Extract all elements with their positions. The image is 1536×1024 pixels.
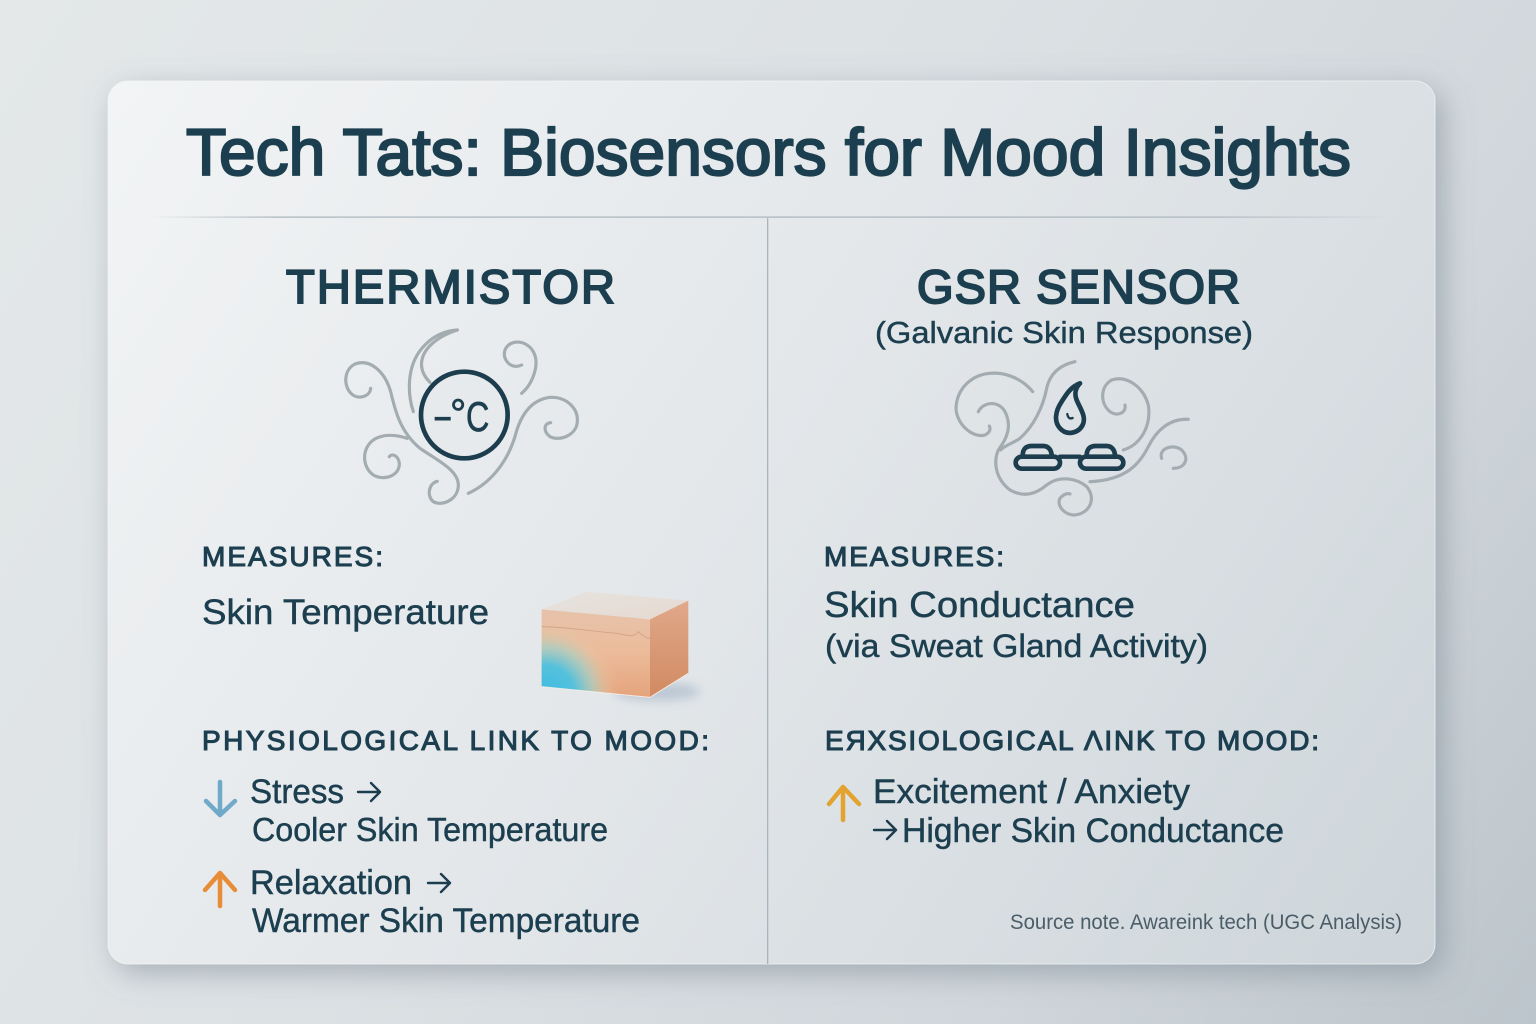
text: stress: Stress	[250, 773, 344, 811]
text: via sweat gland activity: (via Sweat Gland Activity)	[825, 628, 1208, 664]
label: physiological link: EЯXSIOLOGICAL ΛINK TO MOOD:	[825, 725, 1319, 756]
source note: Source note. Awareink tech (UGC Analysis)	[1010, 911, 1402, 934]
icon: relaxation right arrow	[428, 874, 450, 892]
text: cooler skin temperature: Cooler Skin Temperature	[252, 811, 608, 848]
icon: sweat drop and electrodes with swirls	[956, 362, 1188, 515]
label: physiological link: PHYSIOLOGICAL LINK TO MOOD:	[202, 725, 709, 756]
heading: thermistor: THERMISTOR	[286, 260, 615, 313]
text: warmer skin temperature: Warmer Skin Temperature	[252, 902, 640, 940]
text: higher skin conductance: Higher Skin Conductance	[902, 812, 1284, 850]
label: measures: MEASURES:	[202, 541, 383, 572]
icon: thermistor with swirls: °	[450, 390, 466, 436]
subheading: galvanic skin response: (Galvanic Skin Response)	[875, 315, 1253, 350]
icon: up arrow	[829, 787, 859, 820]
text: skin temperature: Skin Temperature	[202, 593, 489, 632]
panel: gsr sensor	[824, 260, 1402, 934]
icon: up arrow	[205, 873, 235, 906]
label: measures: MEASURES:	[824, 541, 1004, 572]
icon: down arrow	[206, 782, 235, 815]
text: skin conductance: Skin Conductance	[824, 584, 1135, 625]
icon: thermistor with swirls: C	[466, 393, 489, 440]
heading: gsr sensor: GSR SENSOR	[917, 260, 1240, 313]
text: excitement anxiety: Excitement / Anxiety	[873, 773, 1190, 811]
panel: thermistor	[202, 260, 709, 940]
title: Tech Tats: Biosensors for Mood Insights	[186, 115, 1351, 189]
icon: thermistor with swirls: –	[436, 403, 451, 431]
illustration: skin sample block	[542, 592, 700, 701]
text: relaxation: Relaxation	[250, 864, 412, 902]
icon: thermistor with swirls	[346, 330, 577, 503]
main card panel	[108, 81, 1435, 964]
icon: higher right arrow	[874, 821, 896, 839]
icon: stress right arrow	[358, 783, 380, 801]
